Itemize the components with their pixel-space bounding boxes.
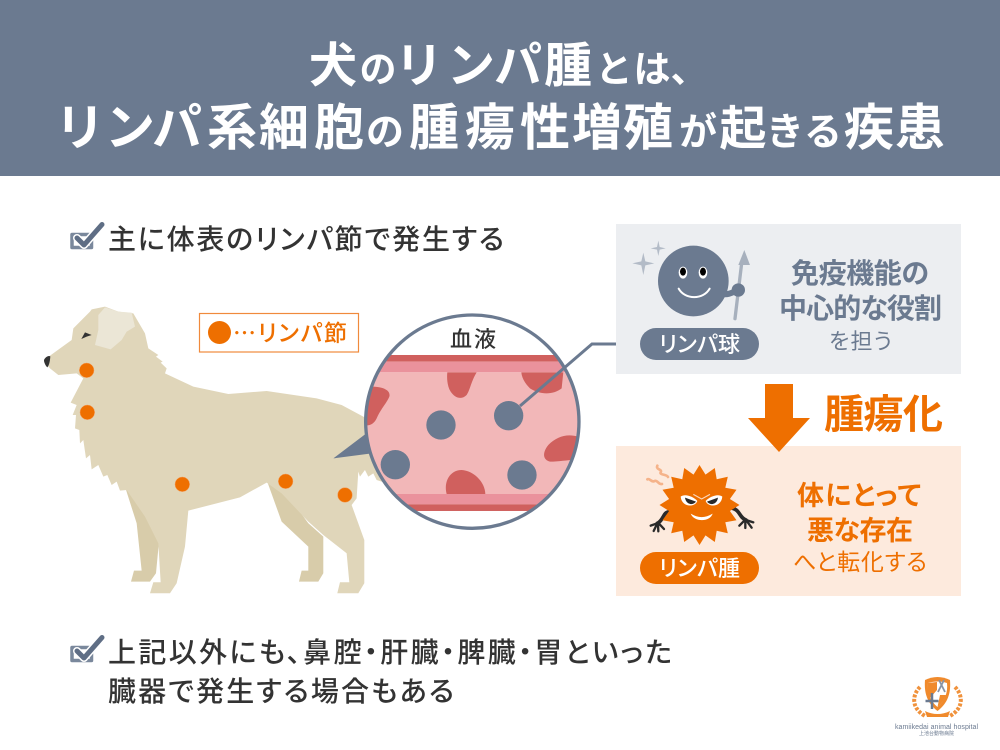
- panel text: を担う: [829, 329, 892, 354]
- icon: lymphoma character: [647, 465, 753, 545]
- icon: checkbox: [72, 224, 102, 248]
- title: きる: [766, 101, 842, 156]
- logo: hospital crest: [895, 677, 978, 737]
- panel: lymphoma: [616, 446, 961, 596]
- title: の: [360, 39, 396, 93]
- pill: lymphoma: [640, 552, 759, 584]
- vessel: [360, 355, 587, 511]
- panel text: [793, 481, 927, 575]
- checkpoint text: [108, 637, 672, 707]
- arms: [651, 508, 753, 531]
- dog illustration: [44, 307, 387, 593]
- panel text: [779, 258, 942, 354]
- panel: lymphocyte: [616, 224, 961, 374]
- lymph node markers: [79, 363, 352, 502]
- title: 腫瘍性増殖: [409, 88, 673, 160]
- label: blood: 血液: [450, 327, 496, 352]
- title: リンパ腫: [395, 26, 592, 96]
- magnified blood vessel: [333, 315, 587, 528]
- checkpoint text: 上記以外にも、鼻腔・肝臓・脾臓・胃といった: [108, 637, 672, 668]
- hospital name: kamiikedai animal hospital: [895, 724, 978, 731]
- checkpoint 2: [72, 637, 672, 707]
- title: 犬: [309, 26, 357, 96]
- pill: lymphoma: リンパ腫: [659, 556, 740, 581]
- title: とは、: [596, 39, 708, 93]
- far legs: [125, 480, 323, 582]
- title: の: [366, 101, 404, 156]
- panel text: へと転化する: [793, 549, 927, 575]
- pill: lymphocyte: [640, 328, 759, 360]
- panel text: 免疫機能の: [791, 258, 929, 289]
- dog body: [44, 307, 387, 593]
- logo: hospital crest: 上池台動物病院: [919, 730, 954, 737]
- panel text: 中心的な役割: [779, 293, 942, 324]
- legend: lymph node: [200, 314, 358, 352]
- checkpoint 1: [72, 224, 504, 255]
- panel text: 悪な存在: [807, 516, 913, 546]
- pill: lymphocyte: リンパ球: [659, 332, 740, 357]
- leader line: [520, 344, 645, 406]
- pointer: [333, 433, 372, 458]
- header banner: [0, 0, 1000, 176]
- face: [681, 494, 722, 520]
- red blood cells: [365, 372, 578, 494]
- arrow: turning malignant: [748, 384, 810, 452]
- lymphocytes: [381, 401, 537, 490]
- icon: checkbox: [72, 638, 102, 660]
- body: [660, 465, 740, 545]
- checkpoint text: 主に体表のリンパ節で発生する: [108, 224, 504, 255]
- icon: lymphocyte character: [632, 241, 750, 319]
- label: malignant change: 腫瘍化: [824, 393, 943, 437]
- nose: [44, 356, 50, 367]
- title: リンパ系細胞: [55, 88, 364, 160]
- wiggle lines: [647, 466, 668, 484]
- eye: [81, 332, 92, 339]
- shield: [925, 677, 950, 711]
- title: [55, 26, 945, 160]
- legend: lymph node: …リンパ節: [233, 314, 347, 348]
- title: が: [679, 101, 717, 156]
- ear: [95, 307, 135, 349]
- panel text: 体にとって: [797, 481, 921, 511]
- title: 起: [720, 90, 766, 159]
- checkpoint text: 臓器で発生する場合もある: [108, 676, 454, 707]
- wreath: [914, 687, 961, 716]
- title: 疾患: [844, 88, 945, 160]
